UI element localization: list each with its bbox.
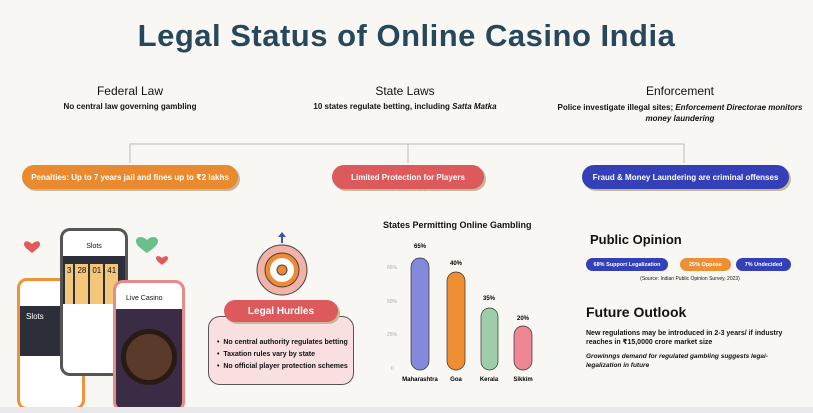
pill: limited protection bbox=[332, 165, 484, 189]
icon: hearts bbox=[24, 237, 168, 265]
column: state laws: 10 states regulate betting, including Satta Matka bbox=[313, 102, 497, 111]
chart: states permitting online gambling: Goa bbox=[450, 377, 462, 383]
phone: left bbox=[17, 278, 85, 410]
panel: future outlook: Growinngs demand for regulated gambling suggests legai-legalization in future bbox=[586, 353, 768, 369]
chart: states permitting online gambling: Sikkim bbox=[513, 377, 533, 383]
chart: states permitting online gambling: 35% bbox=[483, 296, 496, 302]
phone: right: Live Casino bbox=[126, 295, 163, 302]
panel: future outlook: New regulations may be introduced in 2-3 years/ if industry reaches in ₹15,0000 crore market size bbox=[586, 330, 782, 346]
phone: middle: Slots bbox=[86, 243, 102, 250]
chart: states permitting online gambling bbox=[383, 220, 533, 383]
phone: middle: 28 bbox=[77, 266, 86, 275]
chart: states permitting online gambling: 65% bbox=[387, 265, 398, 271]
pill: penalties bbox=[22, 165, 238, 189]
hurdles heading pill bbox=[224, 300, 338, 322]
panel: future outlook bbox=[586, 304, 782, 369]
hurdles box: • Taxation rules vary by state bbox=[217, 351, 315, 358]
hurdles box bbox=[208, 316, 354, 385]
column: state laws bbox=[313, 84, 497, 111]
panel: public opinion: 68% Support Legalization bbox=[594, 262, 660, 268]
chart: states permitting online gambling: Maharashtra bbox=[402, 377, 438, 383]
column: state laws: State Laws bbox=[375, 84, 435, 98]
illustration: phones bbox=[17, 228, 185, 407]
chart: states permitting online gambling: 20% bbox=[517, 316, 530, 322]
chart: states permitting online gambling: 40% bbox=[450, 261, 463, 267]
phone: middle: 3 bbox=[67, 266, 71, 275]
phone: middle: 41 bbox=[107, 266, 116, 275]
panel: legal hurdles bbox=[208, 300, 354, 385]
title: Legal Status of Online Casino India bbox=[138, 18, 675, 53]
pill: fraud: Fraud & Money Laundering are criminal offenses bbox=[593, 172, 778, 182]
phone: right bbox=[113, 280, 185, 412]
connector lines bbox=[130, 144, 684, 163]
panel: public opinion: (Source: Indian Public Opinion Survey, 2023) bbox=[640, 276, 740, 282]
chart: states permitting online gambling: 0 bbox=[391, 366, 394, 372]
column: enforcement: Enforcement bbox=[646, 84, 714, 98]
phone: middle: 01 bbox=[92, 266, 101, 275]
panel: public opinion: 7% Undecided bbox=[745, 262, 782, 268]
panel: public opinion: 25% Oppose bbox=[689, 262, 722, 268]
pill: penalties: Penalties: Up to 7 years jail and fines up to ₹2 lakhs bbox=[31, 172, 229, 182]
pill: fraud bbox=[582, 165, 789, 189]
phone: middle bbox=[60, 228, 128, 376]
chart: states permitting online gambling: 25% bbox=[387, 332, 398, 338]
pill: limited protection: Limited Protection for Players bbox=[351, 172, 465, 182]
hurdles heading pill: Legal Hurdles bbox=[248, 306, 314, 316]
column: federal law: No central law governing gambling bbox=[64, 102, 196, 111]
chart: states permitting online gambling: Kerala bbox=[480, 377, 499, 383]
panel: public opinion bbox=[586, 232, 791, 282]
hurdles box: • No central authority regulates betting bbox=[217, 339, 348, 346]
column: federal law: Federal Law bbox=[97, 84, 163, 98]
column: enforcement: Police investigate illegal sites; Enforcement Directorae monitors money laundering bbox=[558, 103, 802, 123]
hurdles box: • No official player protection schemes bbox=[217, 363, 348, 370]
phone: left: Slots bbox=[26, 312, 44, 321]
chart: states permitting online gambling: 65% bbox=[414, 244, 427, 250]
chart: states permitting online gambling: States Permitting Online Gambling bbox=[383, 220, 532, 230]
column: enforcement bbox=[558, 84, 802, 123]
panel: public opinion: Public Opinion bbox=[590, 232, 682, 247]
column: federal law bbox=[64, 84, 196, 111]
panel: future outlook: Future Outlook bbox=[586, 304, 686, 320]
icon: roulette wheel bbox=[256, 232, 308, 296]
chart: states permitting online gambling: 50% bbox=[387, 299, 398, 305]
